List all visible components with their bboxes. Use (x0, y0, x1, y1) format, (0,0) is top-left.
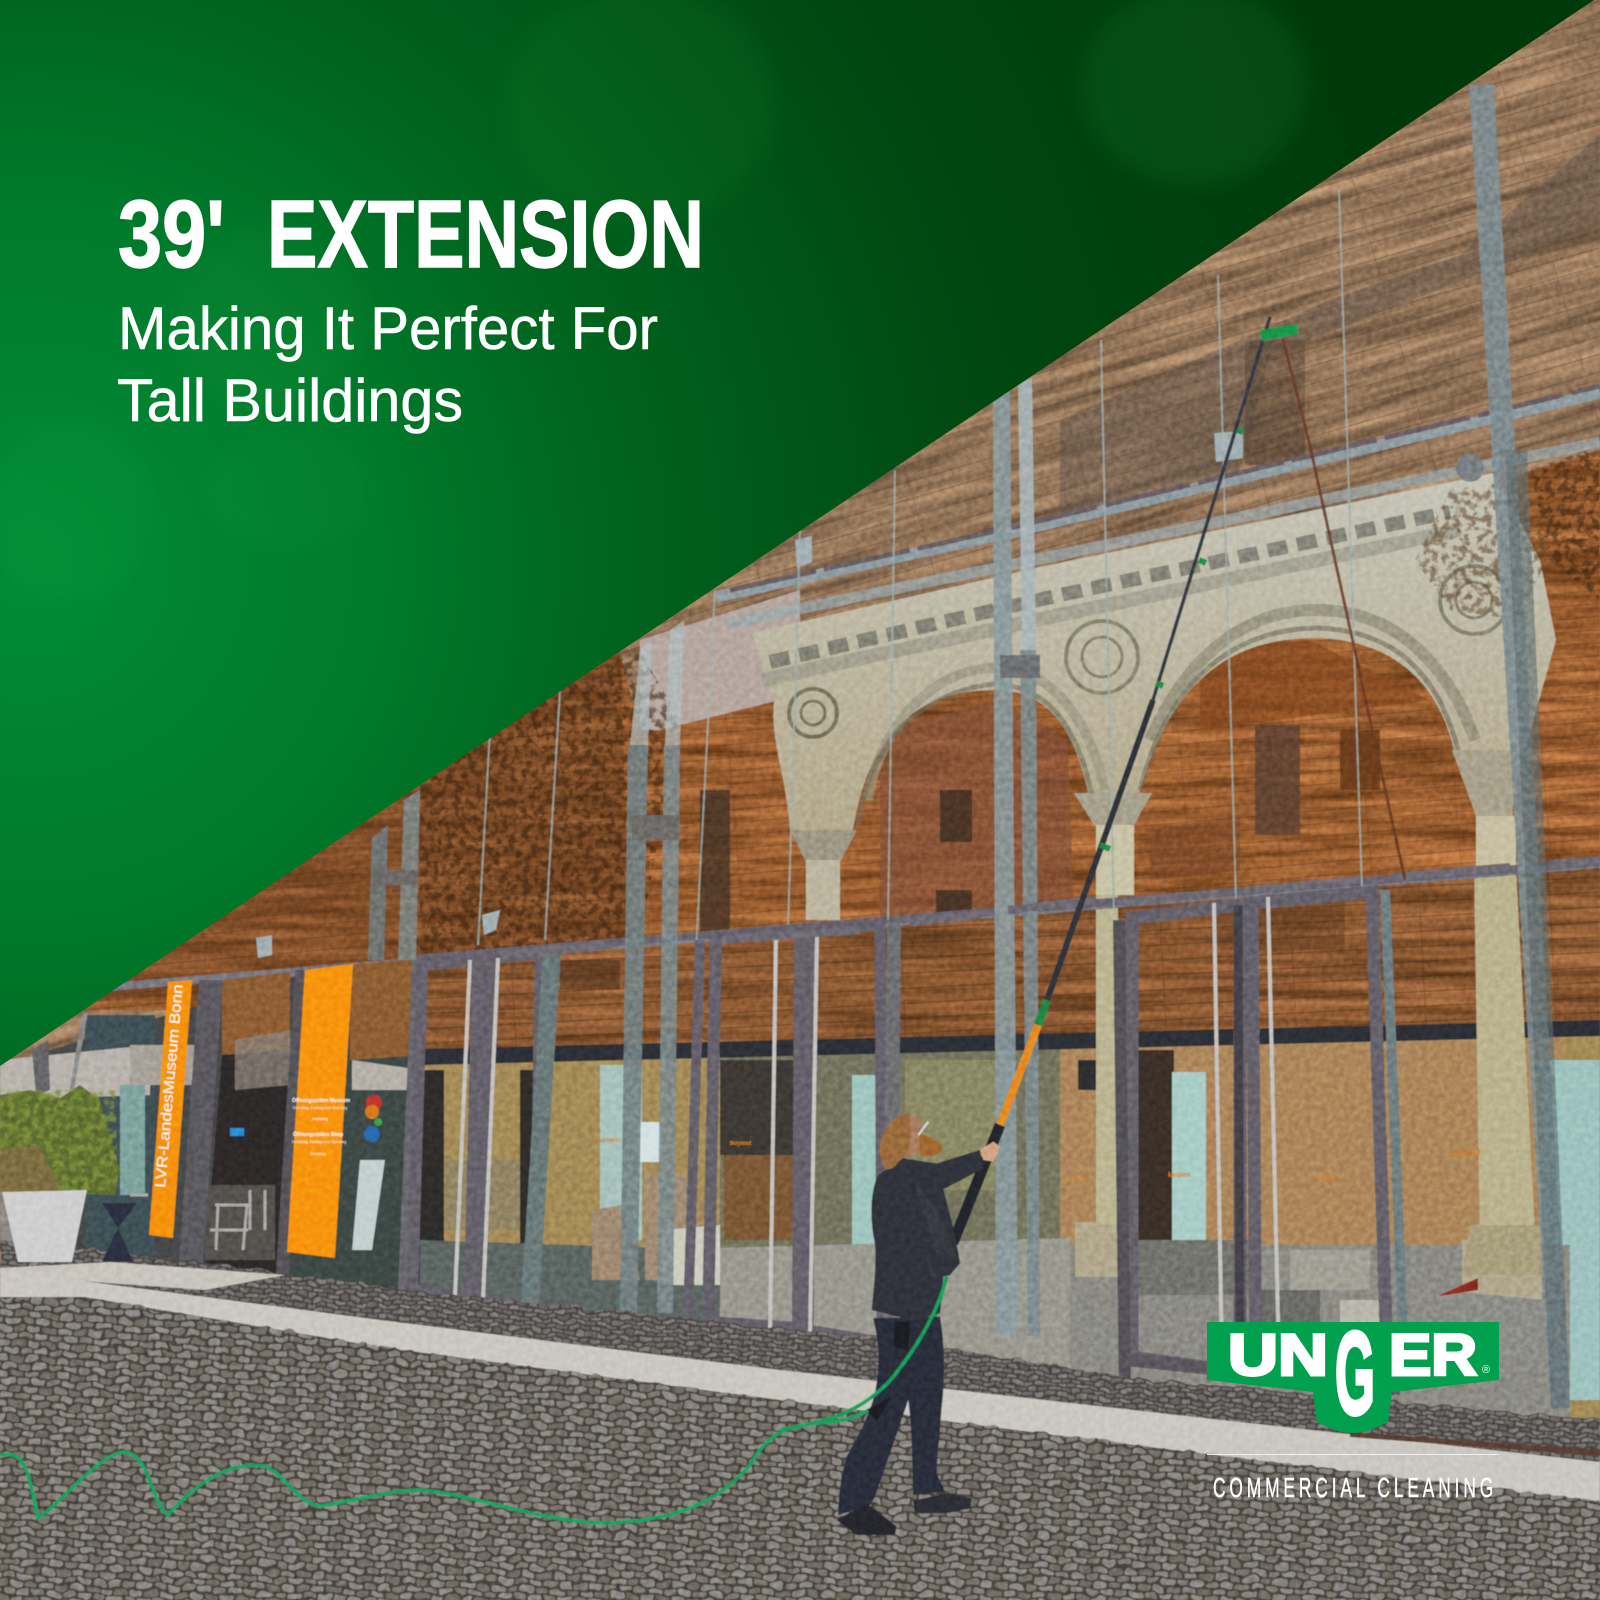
jacket (871, 1150, 983, 1321)
left glass bays (0, 958, 420, 1298)
subtitle: Tall Buildings (117, 367, 463, 434)
orange banner: opening hours: Samstag (312, 1116, 328, 1121)
tagline: COMMERCIAL CLEANING (1213, 1472, 1493, 1503)
orange banner: LVR-LandesMuseum Bonn (149, 980, 192, 1238)
window cleaning trail on glass (1245, 340, 1305, 465)
bokeh lights (0, 0, 1307, 600)
orange building reflection (84, 450, 1600, 1010)
title (118, 181, 704, 288)
reflected shop lettering: kaufen (1168, 1172, 1191, 1179)
logo shield (1207, 1322, 1499, 1433)
stone plinth behind glass (720, 1222, 1570, 1425)
ground: dark cobbles by the building (0, 1240, 1600, 1600)
head (907, 1113, 923, 1158)
stone arcade reflection (752, 473, 1556, 830)
dark ceiling band (300, 1020, 1600, 1068)
jacket shading (913, 1180, 957, 1277)
thin glass joints (478, 190, 1362, 950)
worker with pole (780, 1113, 1000, 1535)
subtitle (117, 295, 658, 434)
green hose (0, 1278, 946, 1523)
dark piers (32, 958, 424, 1290)
white pavement strip (0, 1270, 1600, 1503)
left shoe (837, 1503, 897, 1535)
orange banner: opening hours: Öffnungszeiten Shop (293, 1131, 343, 1138)
registered mark: ® (1482, 1364, 1490, 1376)
upper facade: dark reflected shadow (1060, 135, 1600, 520)
lower facade: interior (400, 1030, 1600, 1420)
beard (919, 1133, 943, 1156)
horizontal glazing bars (716, 386, 1600, 624)
rust drain edge (1350, 1432, 1600, 1456)
pole grip markings (1100, 430, 1243, 849)
orange banner: opening hours: Dienstag, Freitag und Sonntag (292, 1139, 346, 1144)
orange banner: opening hours: Dienstag, Freitag und Sonntag (293, 1105, 347, 1110)
orange banner: opening hours (287, 964, 353, 1258)
transom bar (0, 858, 1600, 1000)
reflected shop lettering: acheter (1315, 1175, 1340, 1182)
reflected shop lettering: buyand (730, 1141, 752, 1147)
tree reflection left (420, 650, 680, 1000)
squeegee brush head (1260, 324, 1298, 341)
logo wordmark: ER (1389, 1323, 1477, 1388)
café chairs (130, 1190, 265, 1250)
orange banner: opening hours: Samstag (310, 1151, 326, 1156)
glasses (918, 1122, 928, 1135)
tree reflection right (1530, 445, 1600, 600)
logo wordmark (1228, 1308, 1477, 1440)
planter with shrub (0, 1085, 137, 1262)
hand (980, 1142, 1000, 1162)
hose near worker (780, 1277, 947, 1430)
orange banner: opening hours: Öffnungszeiten Museum (292, 1097, 351, 1104)
reflected shop lettering (600, 1138, 1481, 1182)
trousers (838, 1317, 945, 1515)
cord from the squeegee (1283, 339, 1405, 880)
lower facade: wood band (301, 868, 1600, 1050)
logo wordmark: UN (1228, 1323, 1328, 1388)
green diagonal panel (0, 0, 1594, 1066)
trouser patches (867, 1322, 910, 1422)
darker wood, left bays (0, 650, 630, 1010)
water-fed pole (953, 317, 1270, 1243)
reflected tree over stone (1415, 480, 1555, 620)
dry grass among the cobbles (0, 1300, 1600, 1600)
red cushion (1440, 1278, 1478, 1296)
title: EXTENSION (267, 181, 704, 288)
ground: cobblestones (0, 1297, 1600, 1600)
transom cover plates (500, 860, 1600, 955)
reflected shop lettering: acheter (600, 1138, 622, 1144)
title: 39' (118, 181, 225, 288)
reflected shop lettering: buyand (1452, 1148, 1481, 1157)
door bottom rail (1125, 1352, 1400, 1395)
vertical glass mullions (368, 85, 1570, 1408)
pale paving by the entrance (0, 1262, 285, 1290)
door frames (412, 890, 1405, 1395)
notice on door (637, 1122, 662, 1162)
stone column shafts (1096, 868, 1546, 1275)
reflected shop lettering: sorphot (1065, 1176, 1087, 1182)
reflected windows and dark tree (700, 640, 1430, 940)
columns (790, 750, 1520, 920)
logo rule (1207, 1454, 1499, 1455)
sky reflection (640, 590, 800, 730)
subtitle: Making It Perfect For (118, 295, 658, 362)
Unger logo (1207, 1308, 1499, 1440)
hair (880, 1113, 913, 1169)
orange banner: LVR-LandesMuseum Bonn: LVR-LandesMuseum Bonn (152, 984, 187, 1188)
fixings on glass (256, 431, 1484, 958)
logo wordmark: G (1335, 1308, 1375, 1440)
right shoe (913, 1493, 972, 1513)
door handles (455, 897, 1279, 1360)
